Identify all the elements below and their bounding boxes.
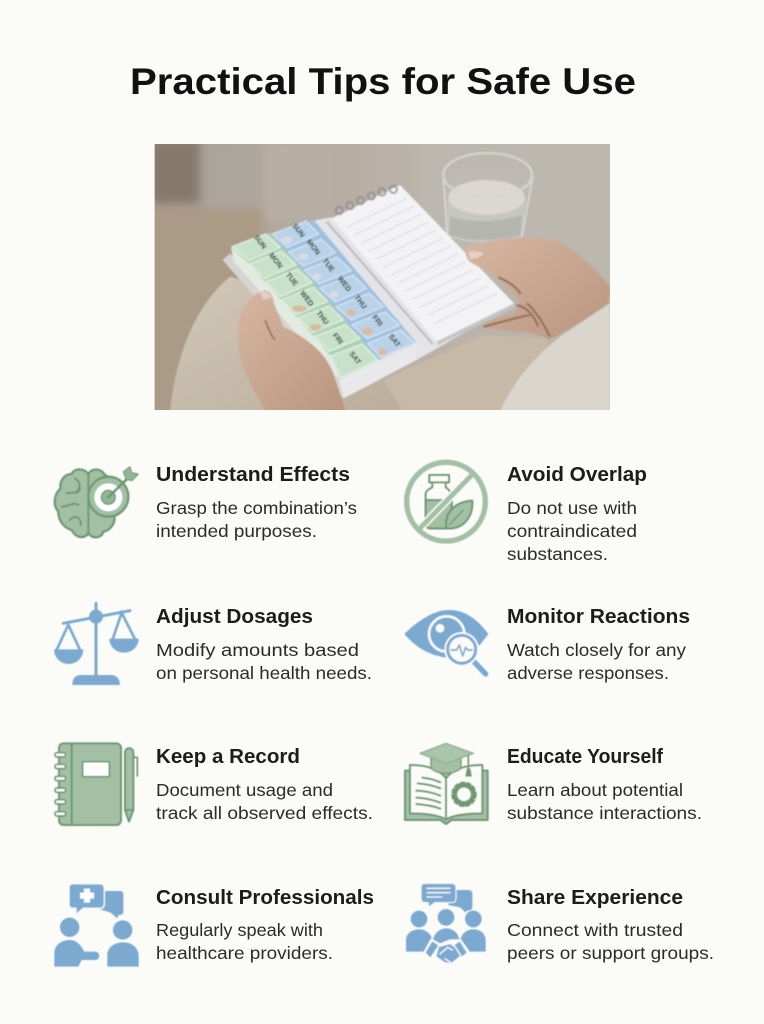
- description: contraindicated: [507, 521, 637, 541]
- notebook: [327, 185, 515, 345]
- heading: Share Experience: [507, 887, 683, 909]
- pill box green row: [231, 233, 379, 379]
- tip: Understand Effects: [55, 464, 357, 541]
- icon: eye with magnifier: [404, 610, 488, 674]
- heading: Avoid Overlap: [507, 464, 647, 486]
- tip: Educate Yourself: [405, 743, 702, 824]
- description: Document usage and: [156, 780, 333, 800]
- title: Practical Tips for Safe Use: [130, 61, 636, 102]
- description: peers or support groups.: [507, 943, 714, 963]
- pills: [292, 305, 387, 355]
- pill box day labels: [252, 221, 403, 367]
- icon: brain with target: [55, 467, 138, 537]
- heading: Consult Professionals: [156, 887, 374, 909]
- tip: Keep a Record: [55, 743, 373, 825]
- description: substance interactions.: [507, 803, 702, 823]
- right hand: [466, 238, 610, 340]
- pill box day labels: THU: [352, 293, 369, 310]
- pill box day labels: SAT: [347, 349, 364, 367]
- description: Do not use with: [507, 498, 637, 518]
- description: adverse responses.: [507, 663, 669, 683]
- tip: Share Experience: [406, 883, 714, 967]
- tip: Monitor Reactions: [404, 606, 690, 683]
- glass of water: [443, 153, 533, 242]
- pill box day labels: SUN: [252, 233, 269, 251]
- heading: Understand Effects: [156, 464, 350, 486]
- description: Learn about potential: [507, 780, 683, 800]
- description: Modify amounts based: [156, 640, 359, 660]
- organizer tray: [314, 216, 514, 380]
- pill box day labels: THU: [314, 309, 331, 326]
- pill box day labels: SAT: [387, 332, 403, 349]
- pill box blue row: [271, 219, 416, 360]
- description: Watch closely for any: [507, 640, 686, 660]
- left hand: [238, 291, 346, 412]
- description: track all observed effects.: [156, 803, 373, 823]
- heading: Adjust Dosages: [156, 606, 313, 628]
- description: substances.: [507, 544, 608, 564]
- description: Regularly speak with: [156, 920, 323, 940]
- pill box day labels: FRI: [331, 331, 345, 346]
- pill box day labels: MON: [305, 238, 322, 257]
- tip: Avoid Overlap: [407, 462, 647, 564]
- heading: Monitor Reactions: [507, 606, 690, 628]
- pill box day labels: TUE: [321, 257, 337, 274]
- pill box day labels: TUE: [284, 271, 300, 288]
- icon: notebook and pen: [55, 743, 137, 825]
- icon: balance scale: [54, 603, 139, 685]
- description: intended purposes.: [156, 521, 317, 541]
- pill box day labels: WED: [298, 289, 316, 308]
- tip: Consult Professionals: [54, 884, 374, 967]
- pill box day labels: FRI: [370, 313, 385, 328]
- photo: hands holding pill organizer and notebook: [150, 140, 617, 415]
- pill box day labels: SUN: [290, 221, 307, 239]
- tip: Adjust Dosages: [54, 603, 372, 685]
- icon: two people with medical speech bubbles: [54, 884, 139, 967]
- icon: no bottle and leaf: [407, 462, 485, 541]
- pill box day labels: WED: [336, 274, 353, 293]
- pill box day labels: MON: [267, 251, 285, 270]
- description: healthcare providers.: [156, 943, 333, 963]
- description: Connect with trusted: [507, 920, 683, 940]
- description: on personal health needs.: [156, 663, 372, 683]
- icon: group with handshake and speech bubbles: [406, 883, 486, 967]
- description: Grasp the combination’s: [156, 498, 357, 518]
- heading: Educate Yourself: [507, 746, 663, 768]
- heading: Keep a Record: [156, 746, 300, 768]
- icon: open book with graduation cap and gear: [405, 743, 488, 824]
